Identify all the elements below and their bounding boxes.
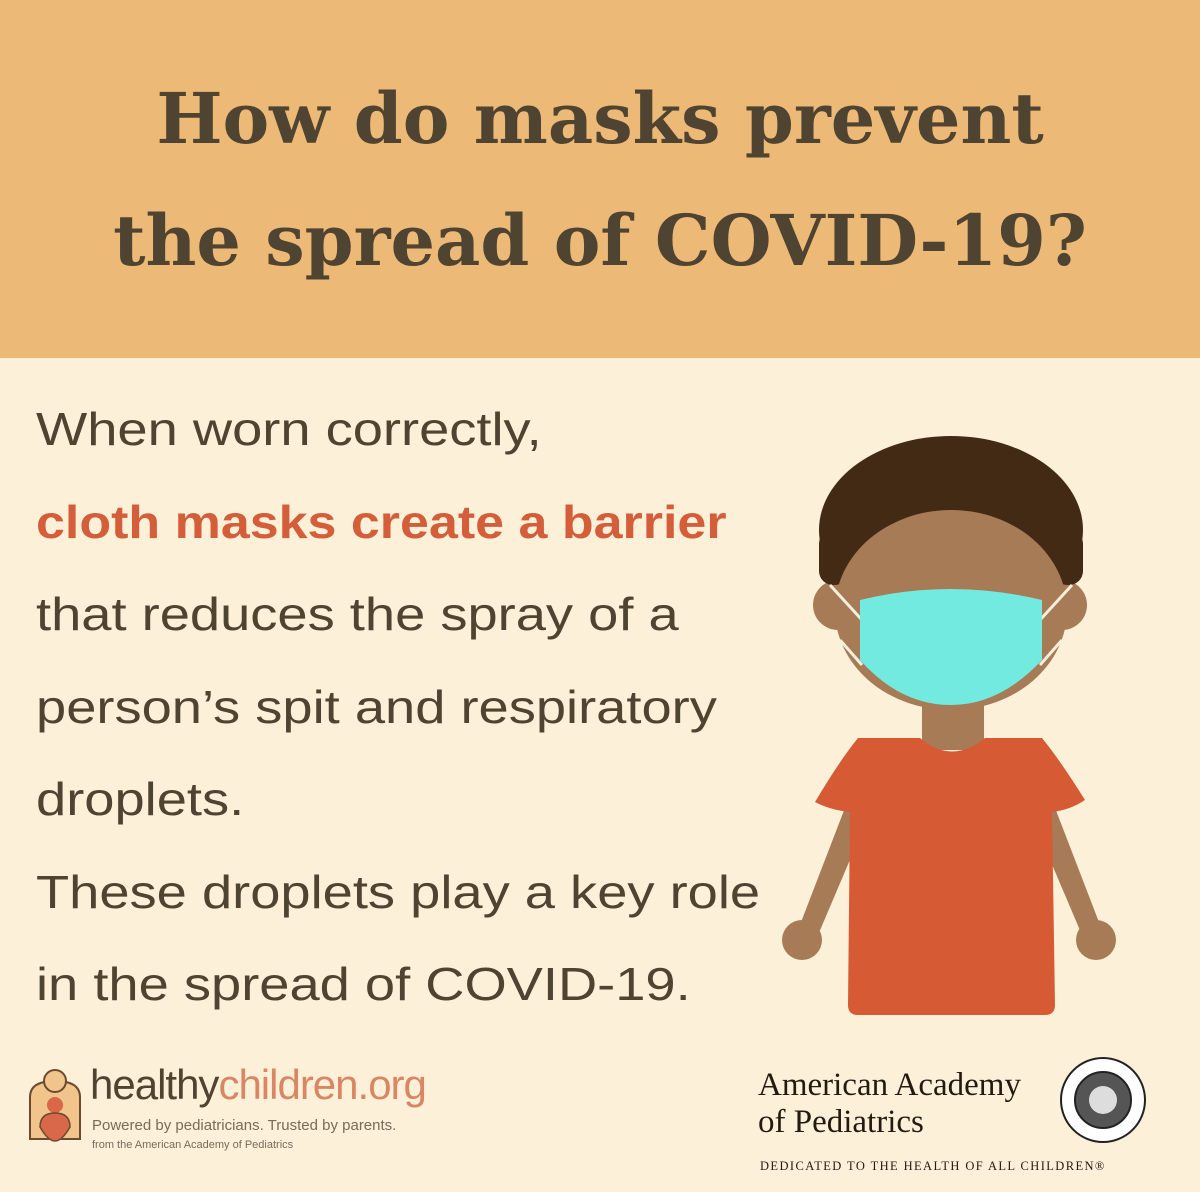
icon: family xyxy=(29,1069,81,1142)
arms xyxy=(782,800,1116,960)
header band xyxy=(0,0,1200,358)
logo: healthychildren.org: Powered by pediatricians. Trusted by parents. xyxy=(92,1117,396,1134)
body text: person’s spit and respiratory xyxy=(36,680,717,732)
mask straps xyxy=(830,585,1072,665)
body text: When worn correctly, xyxy=(36,403,542,455)
logo: healthychildren.org: from the American Academy of Pediatrics xyxy=(92,1139,293,1151)
logo: American Academy of Pediatrics: American Academy xyxy=(758,1067,1021,1103)
shirt xyxy=(815,738,1085,1015)
title: the spread of COVID-19? xyxy=(113,199,1087,282)
mask xyxy=(860,589,1042,705)
body text: droplets. xyxy=(36,773,244,825)
ears xyxy=(813,580,863,630)
hair xyxy=(819,436,1083,624)
body text xyxy=(36,403,760,1010)
icon: AAP seal xyxy=(1060,1057,1146,1143)
face xyxy=(835,510,1067,710)
body text: in the spread of COVID-19. xyxy=(36,958,691,1010)
title: How do masks prevent xyxy=(156,77,1044,160)
neck xyxy=(922,680,984,750)
logo: American Academy of Pediatrics: DEDICATED TO THE HEALTH OF ALL CHILDREN® xyxy=(760,1159,1106,1173)
body text: These droplets play a key role xyxy=(36,866,760,918)
logo: healthychildren.org xyxy=(29,1061,426,1151)
logo: American Academy of Pediatrics xyxy=(758,1057,1146,1173)
logo: American Academy of Pediatrics: of Pediatrics xyxy=(758,1104,924,1140)
title xyxy=(113,77,1087,282)
body text: cloth masks create a barrier xyxy=(36,496,727,548)
logo: healthychildren.org: healthychildren.org xyxy=(90,1061,426,1108)
body text: that reduces the spray of a xyxy=(36,588,679,640)
